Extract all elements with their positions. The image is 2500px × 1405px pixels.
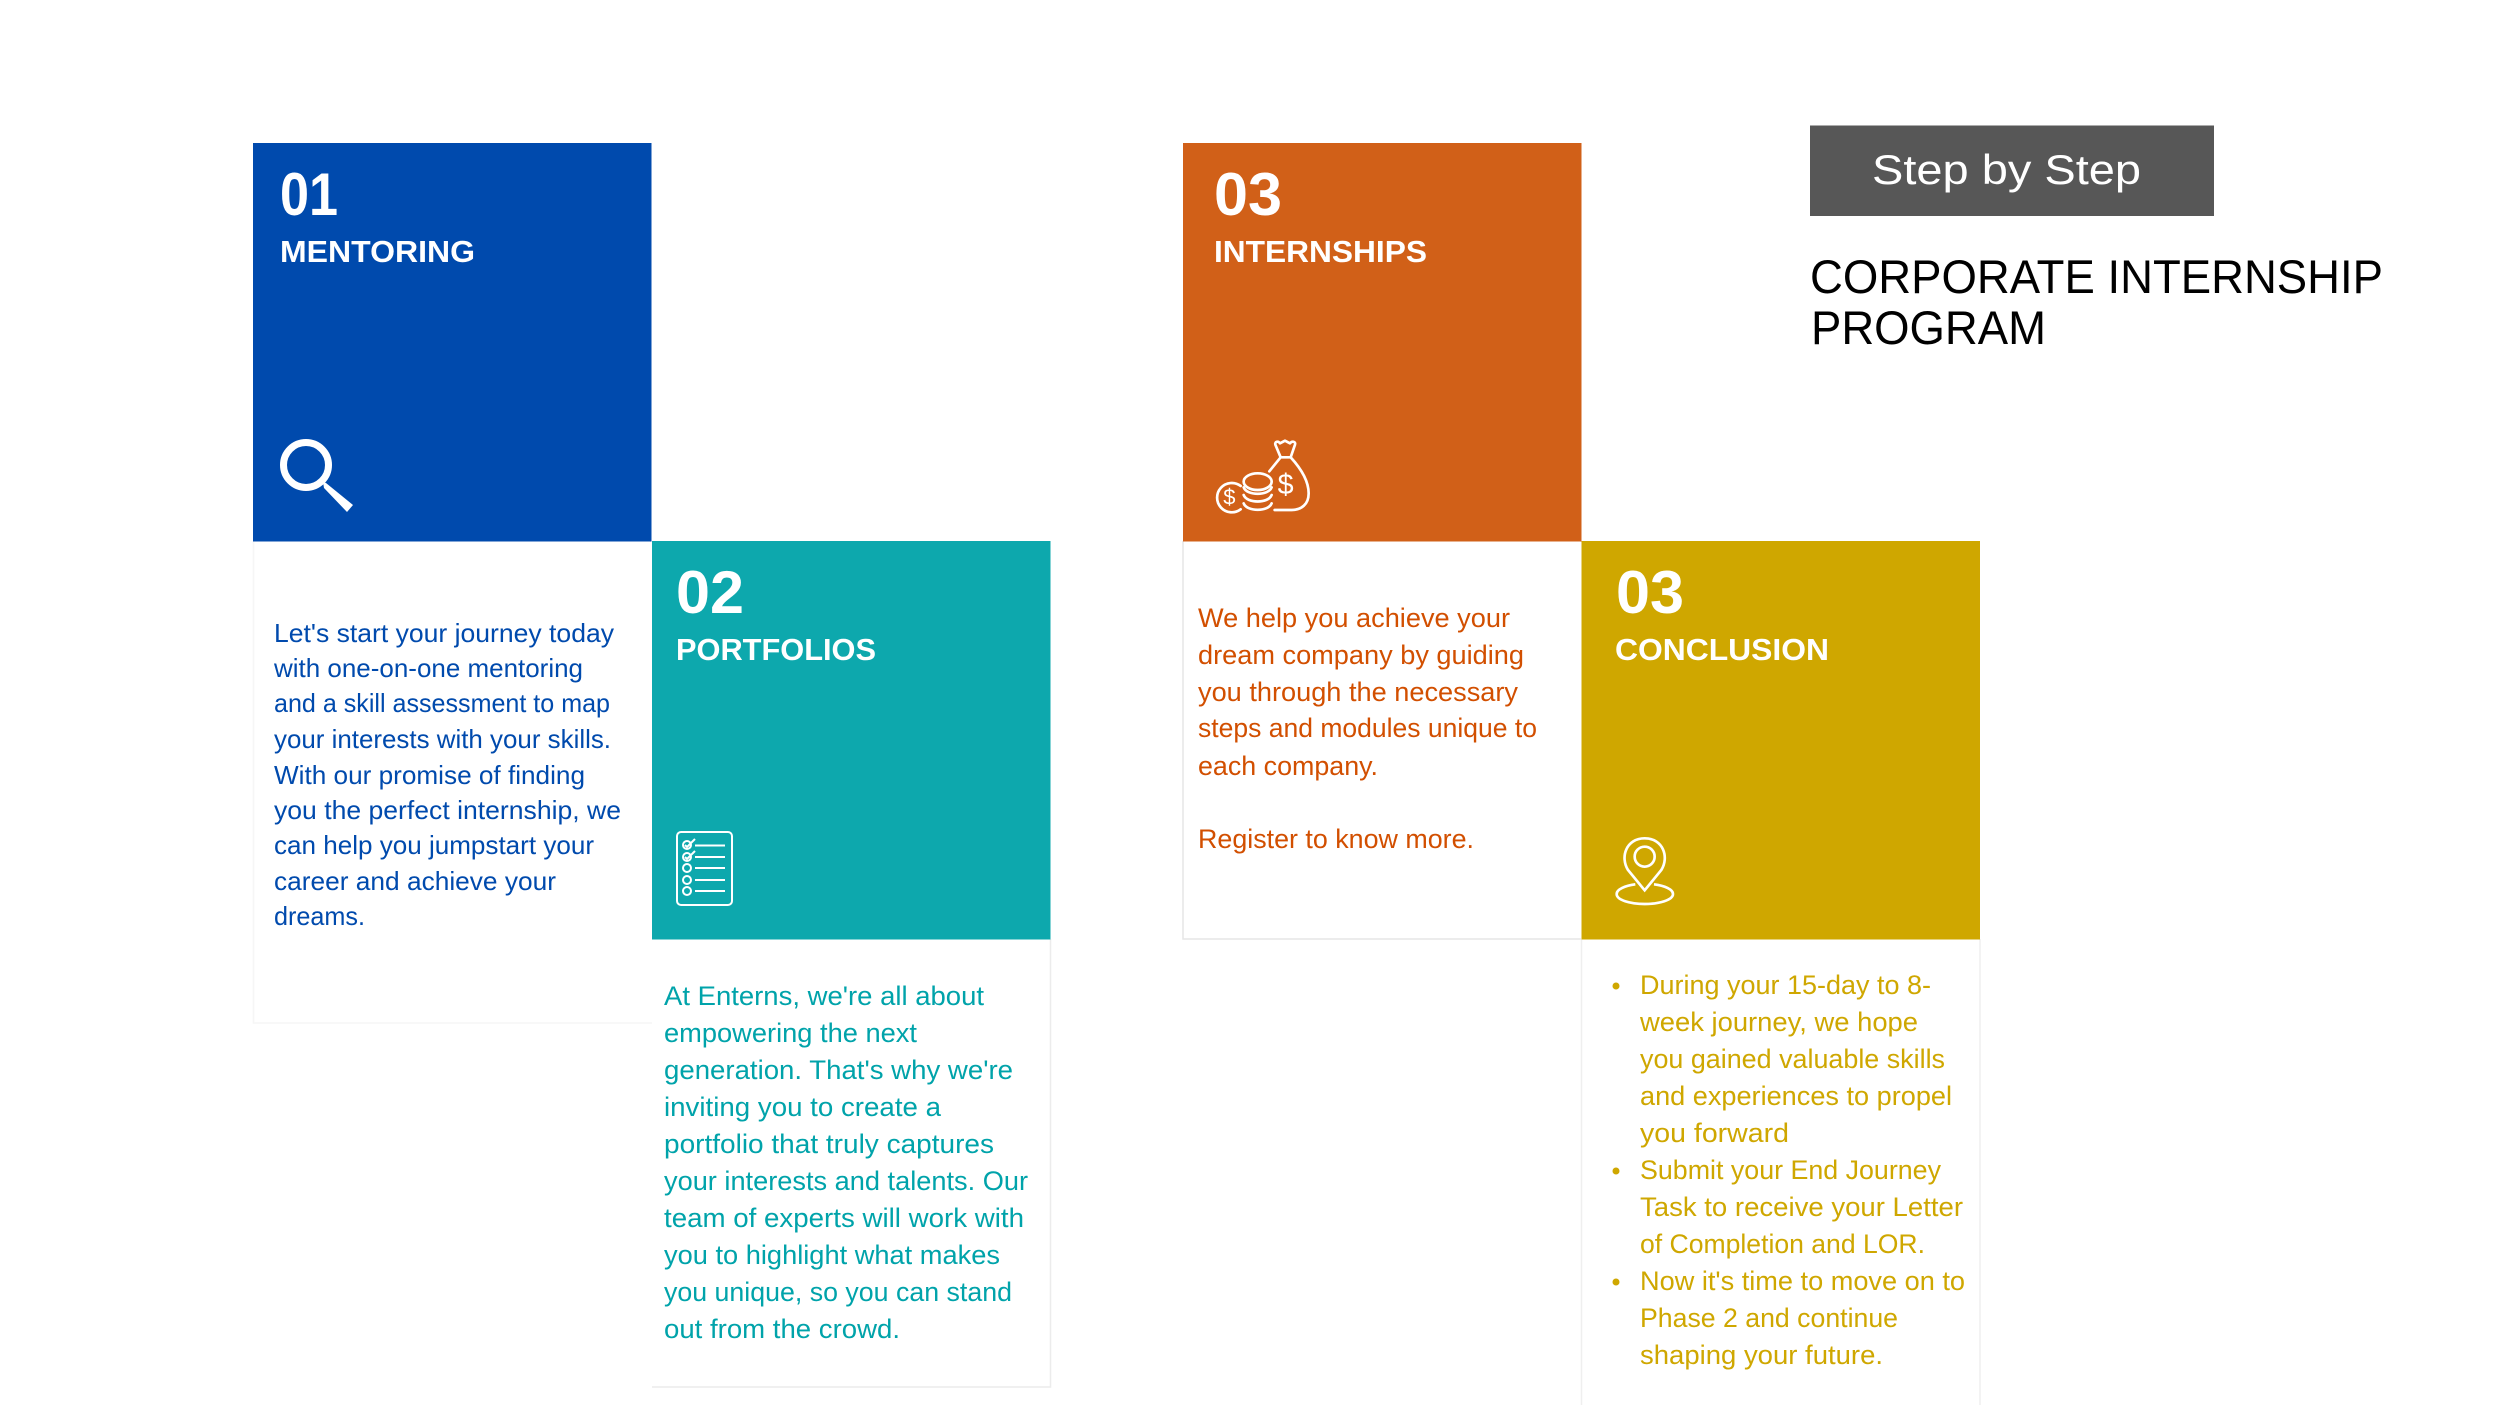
- text: internships description: you through the necessary: [1198, 677, 1518, 707]
- text: conclusion bullet list: Task to receive your Letter: [1640, 1192, 1963, 1222]
- panel: 03 conclusion: [1582, 541, 1980, 1405]
- badge: Step by Step: [1810, 126, 2214, 216]
- icon: checklist: [677, 832, 732, 905]
- card: 01 mentoring: 01: [280, 161, 338, 228]
- text: conclusion bullet list: Phase 2 and continue: [1640, 1303, 1898, 1333]
- card: 02 portfolios: [652, 541, 1050, 940]
- text: conclusion bullet list: week journey, we hope: [1639, 1007, 1918, 1037]
- text: portfolios description: inviting you to create a: [664, 1092, 942, 1122]
- icon: location pin: [1617, 838, 1673, 904]
- icon: money bag and coins: $: [1223, 485, 1235, 510]
- text: internships description: Register to know more.: [1198, 824, 1474, 854]
- text: conclusion bullet list: and experiences to propel: [1640, 1081, 1952, 1111]
- text: conclusion bullet list: During your 15-day to 8-: [1640, 970, 1931, 1000]
- title: [1810, 250, 2383, 354]
- card: 03 conclusion: 03: [1616, 559, 1684, 626]
- text: conclusion bullet list: Submit your End Journey: [1640, 1155, 1941, 1185]
- text: internships description: dream company by guiding: [1198, 640, 1524, 670]
- text: mentoring description: [273, 618, 621, 931]
- text: internships description: each company.: [1198, 751, 1378, 781]
- title: PROGRAM: [1811, 301, 2046, 354]
- text: mentoring description: you the perfect internship, we: [274, 795, 621, 825]
- card: 02 portfolios: 02: [676, 559, 744, 626]
- icon: magnifying glass: [284, 442, 353, 512]
- text: mentoring description: can help you jumpstart your: [274, 830, 594, 860]
- card: 03 internships: INTERNSHIPS: [1214, 234, 1427, 269]
- text: mentoring description: your interests with your skills.: [274, 724, 611, 754]
- text: conclusion bullet list: shaping your future.: [1640, 1340, 1883, 1370]
- panel: 03 internships: [1183, 143, 1582, 939]
- title: CORPORATE INTERNSHIP: [1810, 250, 2383, 303]
- text: mentoring description: Let's start your journey today: [274, 618, 614, 648]
- text: portfolios description: you unique, so you can stand: [664, 1277, 1012, 1307]
- text: internships description: [1198, 603, 1537, 854]
- badge: Step by Step: Step by Step: [1872, 146, 2141, 193]
- text: portfolios description: At Enterns, we're all about: [664, 981, 985, 1011]
- text: conclusion bullet list: of Completion and LOR.: [1640, 1229, 1925, 1259]
- card: 03 internships: [1183, 143, 1582, 542]
- text: conclusion bullet list: you forward: [1640, 1118, 1789, 1148]
- panel: 02 portfolios: [652, 541, 1050, 1387]
- card: 01 mentoring: MENTORING: [280, 234, 475, 269]
- text: mentoring description: With our promise of finding: [274, 760, 585, 790]
- card: 03 internships: 03: [1214, 161, 1282, 228]
- panel: 01 mentoring: [253, 143, 652, 1023]
- text: portfolios description: portfolio that truly captures: [664, 1129, 994, 1159]
- icon: money bag and coins: $: [1278, 469, 1294, 501]
- text: mentoring description: and a skill assessment to map: [274, 688, 610, 718]
- text: conclusion bullet list: [1612, 970, 1965, 1370]
- text: portfolios description: [664, 981, 1028, 1344]
- text: mentoring description: with one-on-one mentoring: [273, 653, 583, 683]
- text: portfolios description: empowering the next: [664, 1018, 917, 1048]
- text: portfolios description: you to highlight what makes: [664, 1240, 1000, 1270]
- text: portfolios description: out from the crowd.: [664, 1314, 900, 1344]
- text: internships description: We help you achieve your: [1198, 603, 1510, 633]
- text: portfolios description: your interests and talents. Our: [664, 1166, 1028, 1196]
- text: internships description: steps and modules unique to: [1198, 713, 1537, 743]
- card: 03 conclusion: [1582, 541, 1980, 940]
- text: mentoring description: career and achieve your: [274, 866, 556, 896]
- card: 03 conclusion: CONCLUSION: [1615, 632, 1829, 667]
- card: 02 portfolios: PORTFOLIOS: [676, 632, 876, 667]
- text: mentoring description: dreams.: [274, 901, 365, 931]
- text: portfolios description: team of experts will work with: [664, 1203, 1024, 1233]
- text: conclusion bullet list: Now it's time to move on to: [1640, 1266, 1965, 1296]
- card: 01 mentoring: [253, 143, 652, 542]
- text: conclusion bullet list: you gained valuable skills: [1640, 1044, 1945, 1074]
- icon: money bag and coins: [1217, 441, 1309, 512]
- text: portfolios description: generation. That's why we're: [664, 1055, 1013, 1085]
